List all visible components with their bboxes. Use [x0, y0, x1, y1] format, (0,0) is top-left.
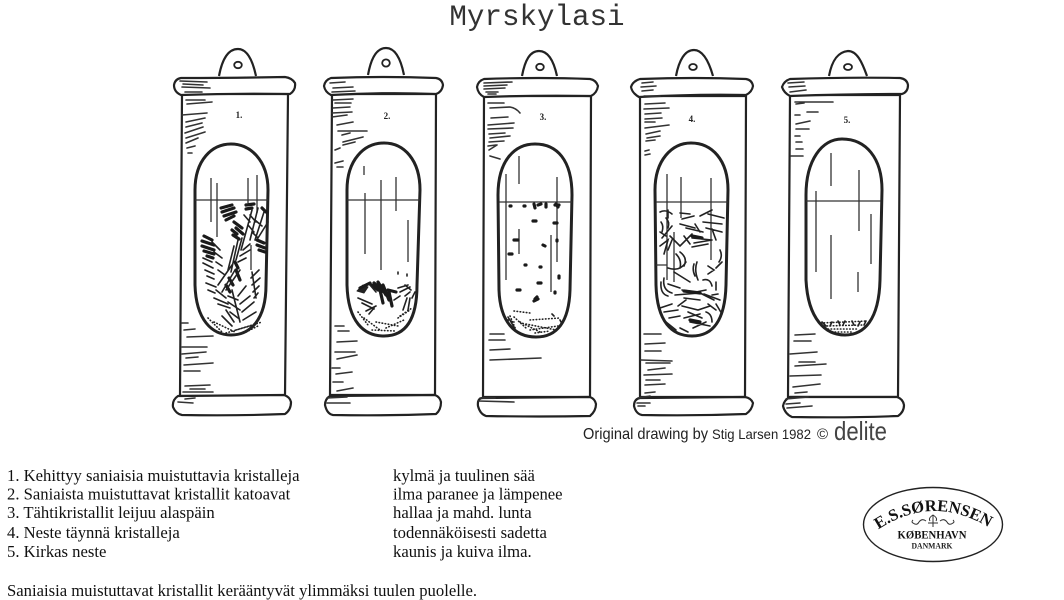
legend: forecasts: hallaa ja mahd. lunta [393, 503, 532, 522]
legend: observations: 2. Saniaista muistuttavat kristallit katoavat [7, 484, 291, 504]
body [330, 94, 436, 395]
liquid line [499, 201, 572, 203]
bottom cap [634, 397, 753, 415]
hatching [478, 82, 541, 402]
drawing credit: Original drawing by [583, 426, 708, 443]
legend: observations: 1. Kehittyy saniaisia muistuttavia kristalleja [7, 466, 300, 485]
legend: observations: 5. Kirkas neste [7, 542, 106, 561]
number: 4. [689, 114, 695, 124]
liquid line [656, 201, 728, 203]
number: 5. [844, 115, 850, 125]
drawing credit: Stig Larsen 1982 [712, 426, 811, 442]
drawing credit [583, 416, 887, 446]
footnote: Saniaisia muistuttavat kristallit kerääntyvät ylimmäksi tuulen puolelle. [7, 581, 477, 600]
settled crystals [357, 272, 415, 331]
glass rods [364, 166, 408, 270]
window [347, 143, 420, 336]
legend: forecasts: ilma paranee ja lämpenee [393, 484, 563, 504]
storm glass 2 [324, 48, 443, 415]
window [655, 143, 728, 336]
liquid line [806, 200, 881, 202]
top cap [477, 78, 598, 97]
country: DANMARK [912, 540, 953, 550]
hanger [368, 48, 404, 75]
liquid line [347, 199, 420, 201]
glass rods [816, 153, 871, 299]
legend: forecasts: todennäköisesti sadetta [393, 523, 547, 542]
hanger [676, 50, 713, 76]
legend: observations [7, 466, 300, 561]
window [806, 139, 882, 335]
glass rods [506, 156, 557, 292]
storm glass 5 [782, 51, 908, 417]
hatching [637, 82, 672, 406]
liquid crystal mass [660, 210, 724, 332]
legend: forecasts: kaunis ja kuiva ilma. [393, 542, 532, 561]
storm glass 1 [173, 49, 295, 415]
liquid line [195, 199, 268, 201]
drawing credit: delite [834, 416, 887, 446]
curved name: E.S.SØRENSEN [873, 500, 994, 530]
legend: forecasts: kylmä ja tuulinen sää [393, 466, 535, 485]
bottom cap [325, 395, 441, 415]
hanger [522, 51, 557, 76]
top cap [782, 78, 908, 96]
storm glass 3 [477, 51, 598, 416]
bottom cap [173, 395, 291, 415]
hatching [786, 82, 833, 408]
top cap [631, 78, 753, 97]
sediment [821, 321, 867, 332]
body [788, 95, 900, 397]
hatching [327, 82, 367, 403]
window [498, 144, 572, 337]
bottom cap [783, 397, 904, 417]
fern crystals [202, 204, 268, 333]
body [640, 96, 746, 397]
legend: observations: 4. Neste täynnä kristalleja [7, 523, 180, 542]
hatching [178, 81, 213, 403]
legend: forecasts [393, 466, 563, 561]
star crystals [508, 204, 562, 333]
window [195, 144, 268, 335]
number: 1. [236, 110, 242, 120]
bottom cap [478, 397, 596, 416]
top cap [174, 77, 295, 95]
legend: observations: 3. Tähtikristallit leijuu alaspäin [7, 503, 215, 522]
top cap [324, 77, 443, 95]
maker logo [862, 486, 1004, 562]
city: KØBENHAVN [898, 528, 967, 542]
glass rods [656, 174, 711, 282]
glass rods [211, 175, 257, 270]
number: 3. [540, 112, 546, 122]
number: 2. [384, 111, 390, 121]
body [483, 96, 591, 397]
body [180, 94, 288, 396]
hanger [829, 51, 867, 76]
storm glass 4 [631, 50, 753, 415]
drawing credit: © [817, 426, 828, 443]
title: Myrskylasi [449, 1, 625, 34]
ornament [912, 515, 954, 527]
hanger [219, 49, 256, 76]
